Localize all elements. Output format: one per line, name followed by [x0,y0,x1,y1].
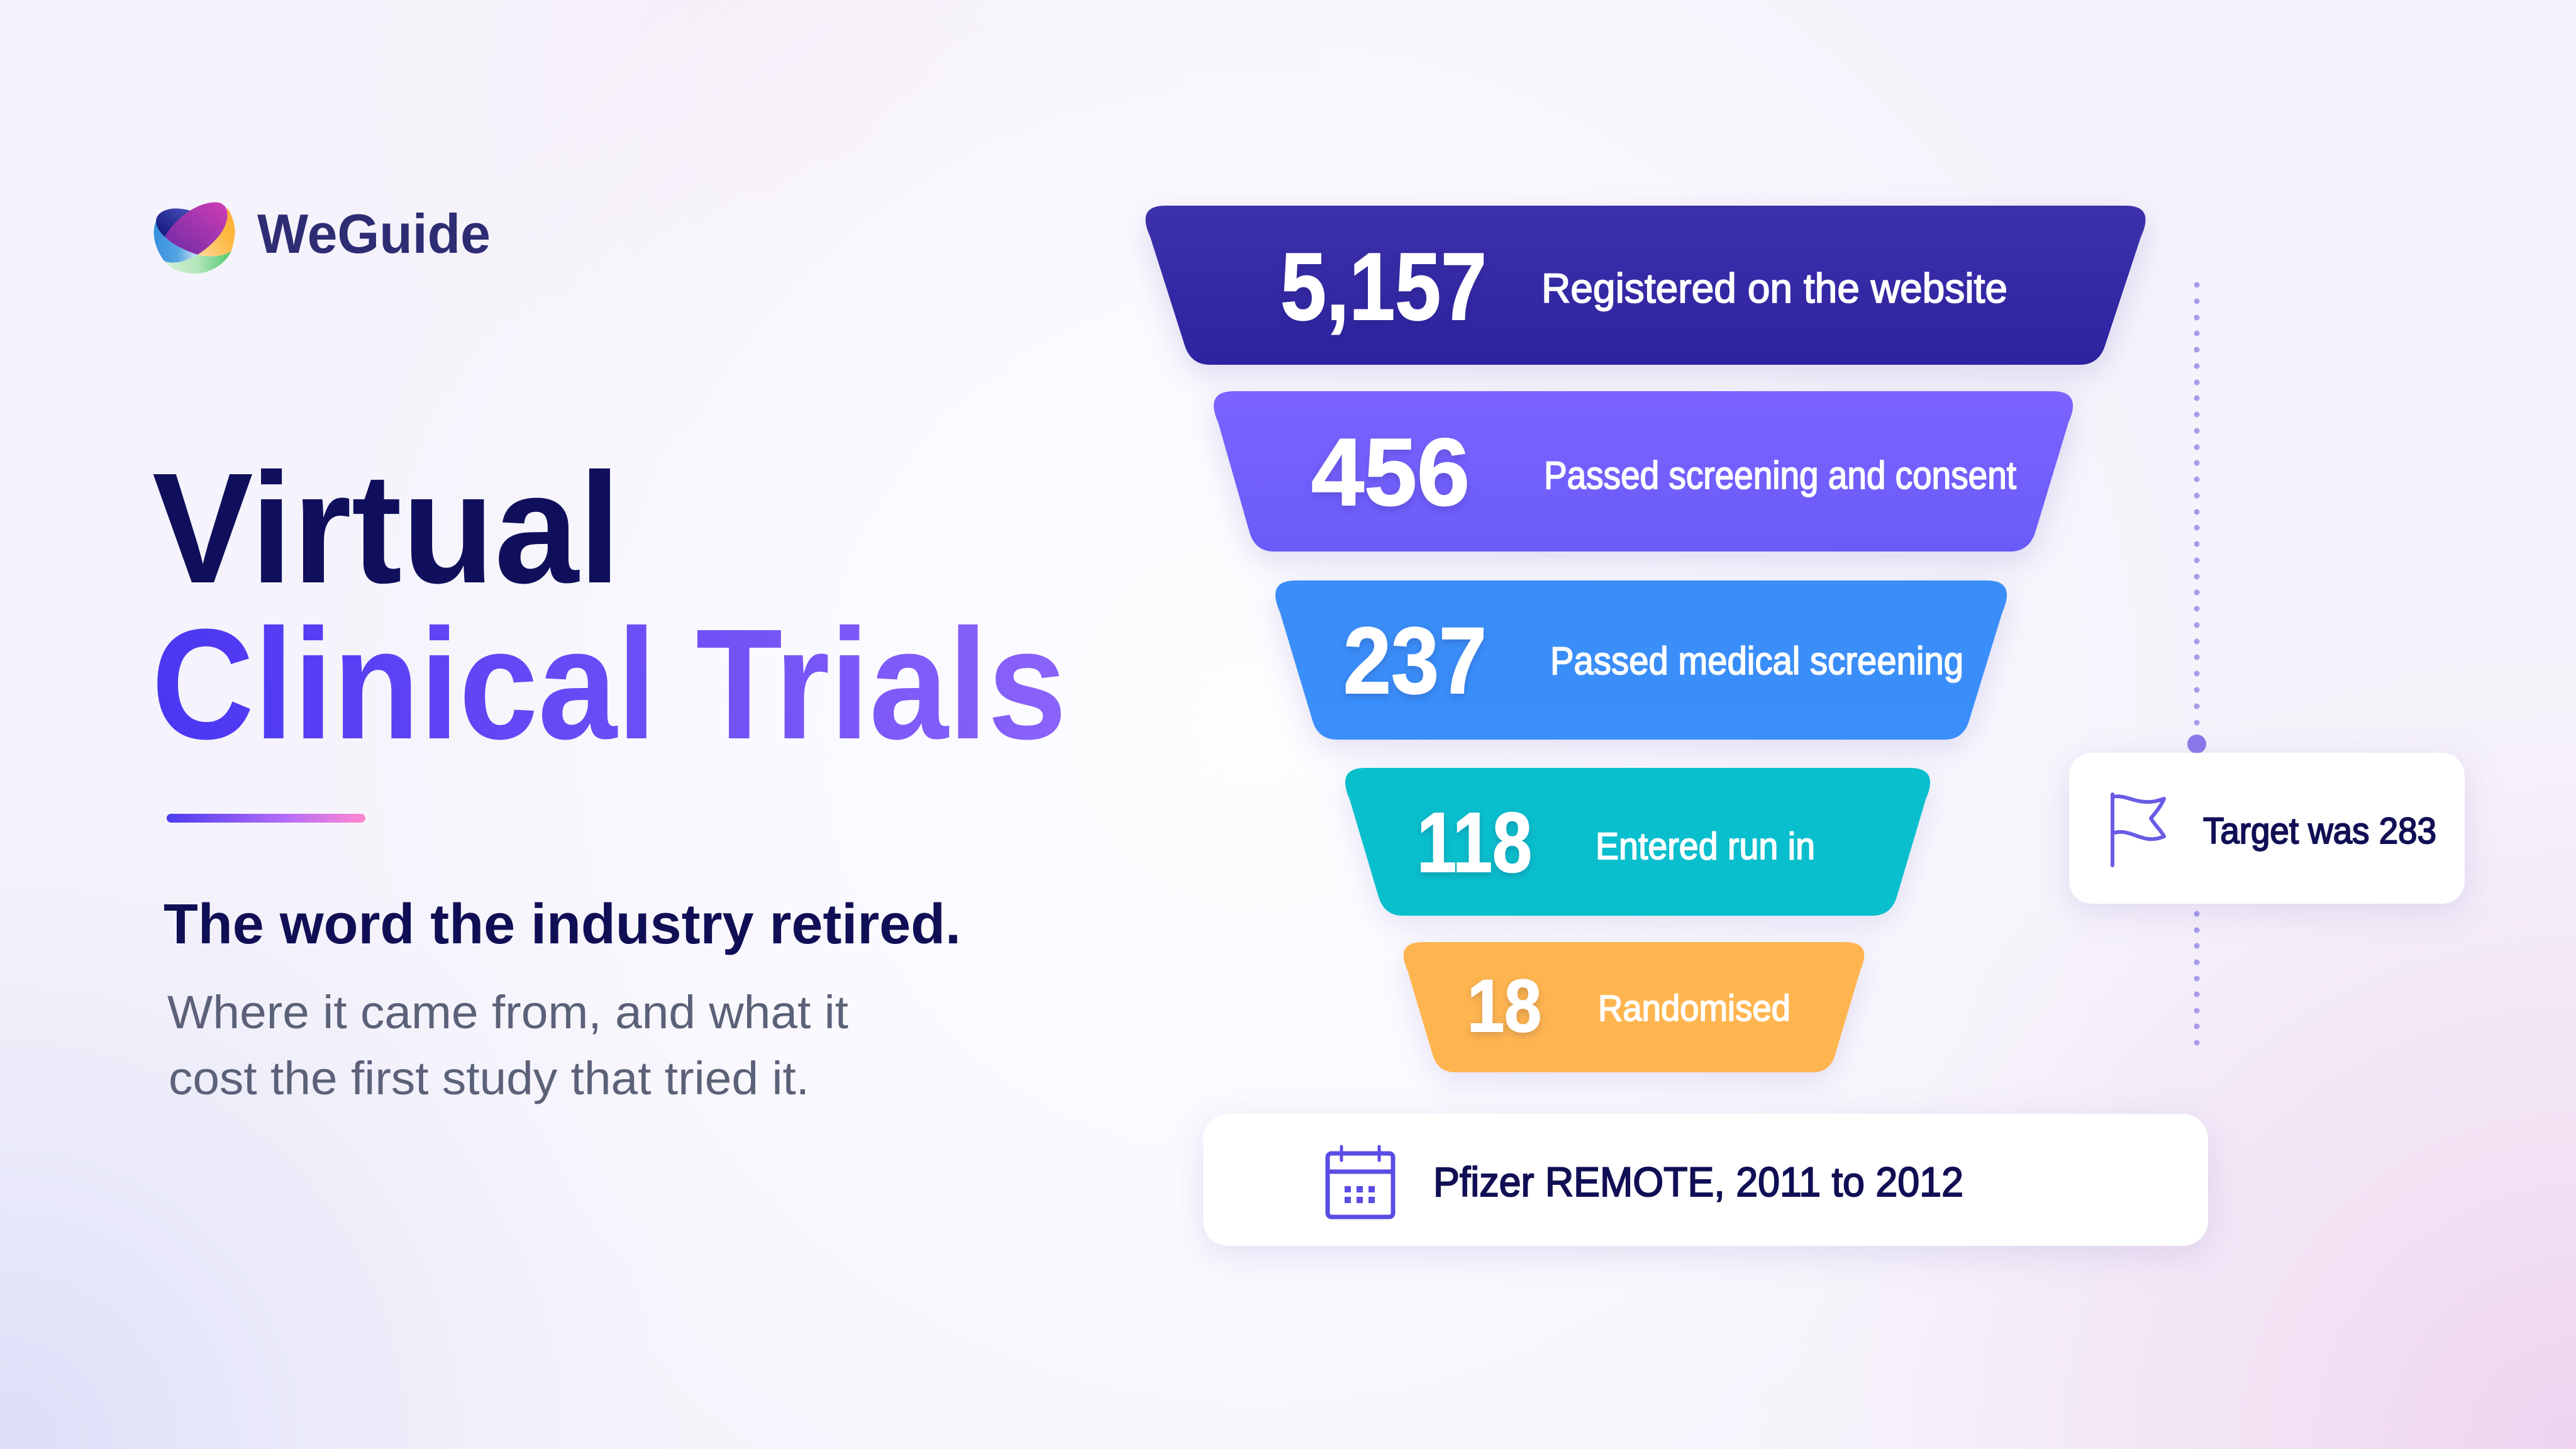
funnel stage 3: passed medical screening [1275,580,2007,740]
funnel stage 4: entered run in: Entered run in [1596,825,1815,867]
funnel stage 5: randomised [1404,942,1864,1072]
callout: target [2069,753,2465,904]
funnel stage 1: registered: Registered on the website [1541,265,2007,311]
funnel stage 4: entered run in [1345,768,1930,916]
title line: Clinical Trials: Clinical Trials [152,596,1067,772]
funnel stage 5: randomised: 18 [1467,965,1541,1048]
funnel stage 1: registered [1145,206,2146,365]
description [167,986,848,1104]
funnel stage 2: passed screening and consent: 456 [1311,419,1470,526]
funnel stage 3: passed medical screening: Passed medical screening [1550,640,1963,683]
card: study name and dates [1203,1114,2208,1246]
callout text: Target was 283 [2203,811,2436,852]
icon: flag [2112,794,2164,865]
title [152,440,1067,772]
funnel chart [1145,206,2146,1072]
icon: WeGuide heart mark [154,203,235,274]
funnel stage 4: entered run in: 118 [1417,795,1532,890]
card text: Pfizer REMOTE, 2011 to 2012 [1433,1158,1963,1205]
funnel stage 2: passed screening and consent [1214,391,2073,552]
funnel stage 3: passed medical screening: 237 [1343,608,1487,713]
funnel stage 1: registered: 5,157 [1280,233,1487,340]
dotted target line [2194,282,2200,1045]
icon: calendar [1328,1146,1393,1217]
title line: Virtual: Virtual [152,440,621,616]
subheading: The word the industry retired. [164,893,961,956]
logo: WeGuide [154,203,491,274]
description line 1: Where it came from, and what it [167,986,848,1038]
brand name: WeGuide [257,203,491,265]
funnel stage 2: passed screening and consent: Passed screening and consent [1544,454,2016,497]
target marker dot [2187,735,2206,753]
accent rule [167,814,365,823]
description line 2: cost the first study that tried it. [169,1052,809,1104]
funnel stage 5: randomised: Randomised [1598,988,1790,1029]
